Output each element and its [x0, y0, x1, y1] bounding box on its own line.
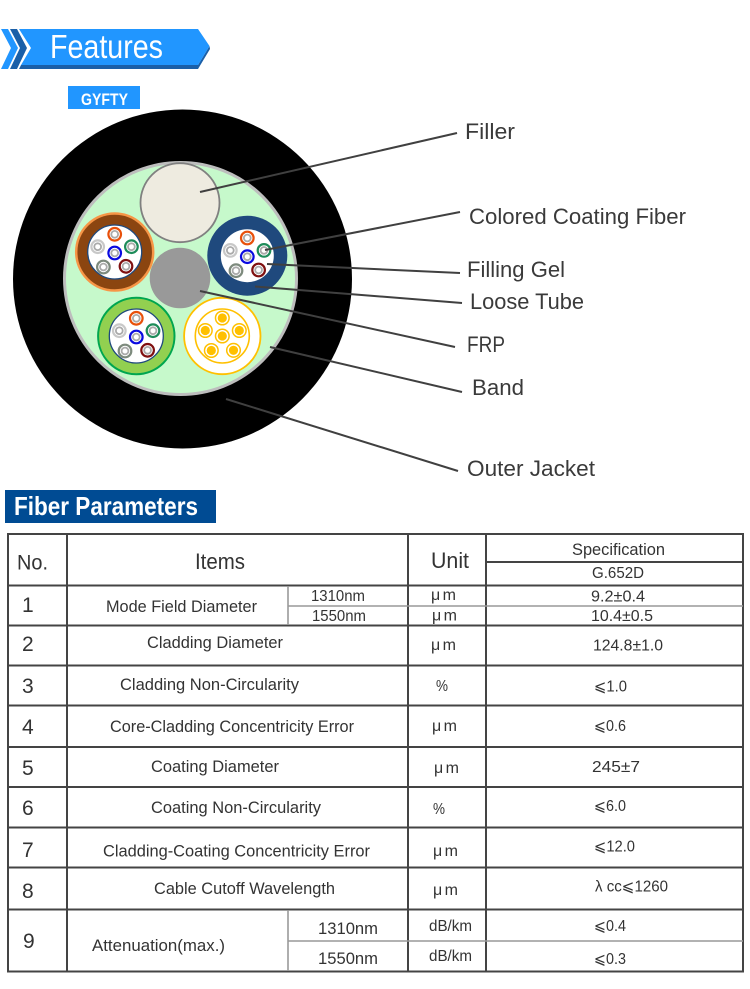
heading: Features: Features — [50, 28, 163, 65]
table header: Unit — [431, 548, 469, 573]
table header: Items — [195, 549, 245, 574]
label: Filling Gel: Filling Gel — [467, 257, 565, 282]
banner: Features — [1, 28, 210, 69]
loose tube: blue — [207, 216, 287, 296]
row numbers: 8 — [22, 880, 34, 903]
table header — [17, 540, 665, 582]
loose tube: green — [98, 298, 174, 374]
units: μ m — [433, 882, 458, 899]
units: μ m — [432, 608, 457, 624]
item names: Coating Diameter — [151, 757, 279, 776]
filler — [140, 163, 220, 242]
row numbers: 4 — [22, 716, 34, 739]
item names: Attenuation(max.) — [92, 936, 225, 955]
units: % — [433, 801, 445, 818]
label: FRP: FRP — [467, 332, 505, 357]
units: μ m — [432, 718, 457, 735]
table header: G.652D — [592, 565, 644, 582]
label: Colored Coating Fiber: Colored Coating Fiber — [469, 204, 686, 229]
item names: 1310nm — [318, 919, 378, 938]
units: μ m — [431, 637, 456, 654]
row numbers: 3 — [22, 675, 34, 698]
specification values: 9.2±0.4 — [591, 588, 645, 606]
table header: No. — [17, 552, 48, 574]
row numbers: 7 — [22, 839, 34, 862]
item names: Cladding Diameter — [147, 633, 283, 652]
row numbers: 9 — [23, 930, 35, 953]
units: μ m — [434, 760, 459, 777]
item names: 1310nm — [311, 588, 365, 605]
units: dB/km — [429, 948, 472, 965]
row numbers — [22, 594, 35, 953]
item names: 1550nm — [312, 608, 366, 625]
heading: Fiber Parameters: Fiber Parameters — [14, 491, 198, 521]
table header: Specification — [572, 540, 665, 559]
item names: Cladding-Coating Concentricity Error — [103, 842, 370, 860]
specification values: ⩽12.0 — [594, 838, 635, 856]
item names: Core-Cladding Concentricity Error — [110, 717, 354, 736]
leader lines — [200, 133, 462, 471]
units: dB/km — [429, 918, 472, 935]
units — [429, 587, 472, 965]
cable cross-section diagram — [13, 110, 352, 448]
specification values: ⩽0.4 — [594, 918, 626, 935]
specification values: λ cc⩽1260 — [595, 878, 668, 896]
item names: Cladding Non-Circularity — [120, 675, 299, 694]
specification values — [591, 588, 668, 968]
badge: GYFTY: GYFTY — [81, 90, 129, 109]
outer jacket — [13, 110, 352, 448]
loose tube: brown — [76, 214, 153, 290]
specification values: 245±7 — [592, 759, 640, 776]
badge: GYFTY — [68, 86, 140, 109]
item names: 1550nm — [318, 949, 378, 968]
row numbers: 5 — [22, 757, 34, 780]
item names: Mode Field Diameter — [106, 597, 257, 616]
item names: Cable Cutoff Wavelength — [154, 879, 335, 898]
table grid — [8, 534, 743, 972]
specification values: ⩽1.0 — [594, 678, 627, 696]
label: Filler: Filler — [465, 119, 515, 144]
band and filling compound — [64, 162, 296, 394]
units: μ m — [433, 843, 458, 860]
row numbers: 2 — [22, 633, 34, 656]
item names — [92, 588, 378, 968]
table: fiber parameters — [8, 534, 743, 972]
specification values: ⩽6.0 — [594, 798, 626, 815]
label: Outer Jacket: Outer Jacket — [467, 456, 595, 481]
loose tube: yellow — [184, 298, 260, 374]
label: Loose Tube: Loose Tube — [470, 289, 584, 314]
item names: Coating Non-Circularity — [151, 798, 321, 817]
specification values: 124.8±1.0 — [593, 638, 663, 654]
row numbers: 6 — [22, 797, 34, 820]
units: % — [436, 678, 448, 695]
FRP central member — [150, 248, 210, 308]
specification values: ⩽0.6 — [594, 718, 626, 735]
specification values: ⩽0.3 — [594, 951, 626, 968]
specification values: 10.4±0.5 — [591, 608, 653, 625]
units: μ m — [431, 587, 456, 604]
row numbers: 1 — [22, 594, 34, 617]
label: Band: Band — [472, 375, 524, 400]
